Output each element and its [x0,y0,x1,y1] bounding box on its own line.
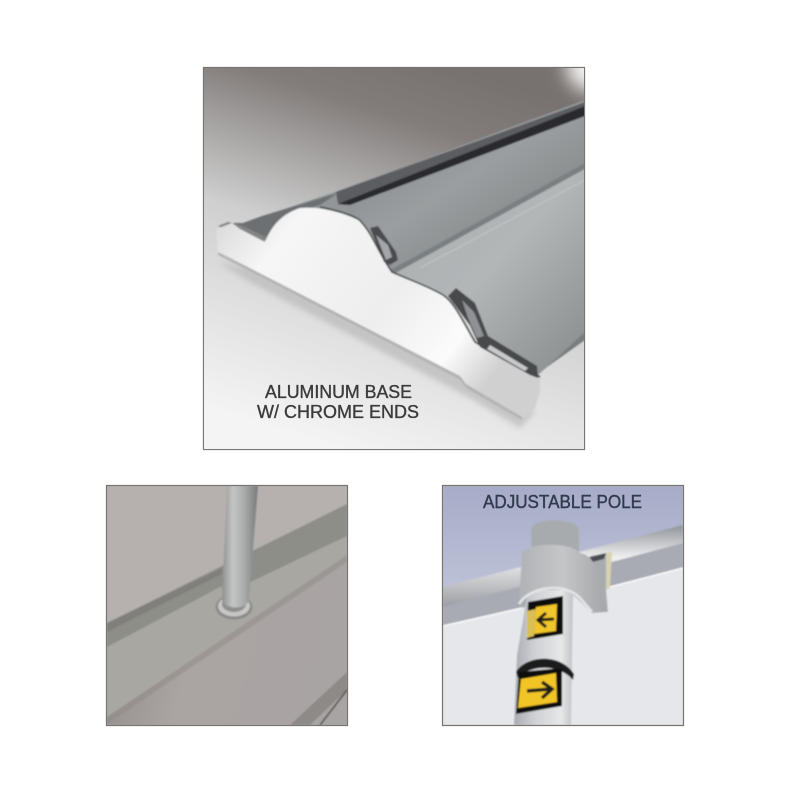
infographic canvas [106,66,684,726]
panel: aluminum base with chrome ends [202,66,586,450]
top rail [443,525,683,607]
grey band under rail [443,543,683,626]
photo background surface [204,68,584,449]
pole collar ring [216,594,252,620]
sky background [443,486,683,587]
chrome end cap [216,208,540,420]
chrome joint upper [370,226,398,265]
upper yellow label [527,596,563,640]
banner surface [443,568,683,725]
support pole [222,486,258,608]
caption: aluminum base: W/ CHROME ENDS [257,402,419,422]
rail bracket [590,554,608,612]
lower slope [108,650,220,725]
chrome edge highlights [320,207,540,377]
caption: aluminum base: ALUMINUM BASE [265,382,412,402]
pole clamp [519,520,606,613]
caption: aluminum base [257,382,419,422]
lower yellow label [516,659,574,714]
rear channel [107,504,347,647]
chrome end lower shading [218,252,522,420]
aluminum base body [218,100,585,376]
pole lower shaft [514,590,573,725]
caption: adjustable pole: ADJUSTABLE POLE [483,492,642,512]
soft shadow under base [218,262,535,428]
panel: pole base detail [106,486,348,726]
back wall surface [107,486,347,623]
panel: adjustable pole [442,486,684,726]
chrome joint lower [448,288,538,378]
flat top strip [107,536,347,717]
